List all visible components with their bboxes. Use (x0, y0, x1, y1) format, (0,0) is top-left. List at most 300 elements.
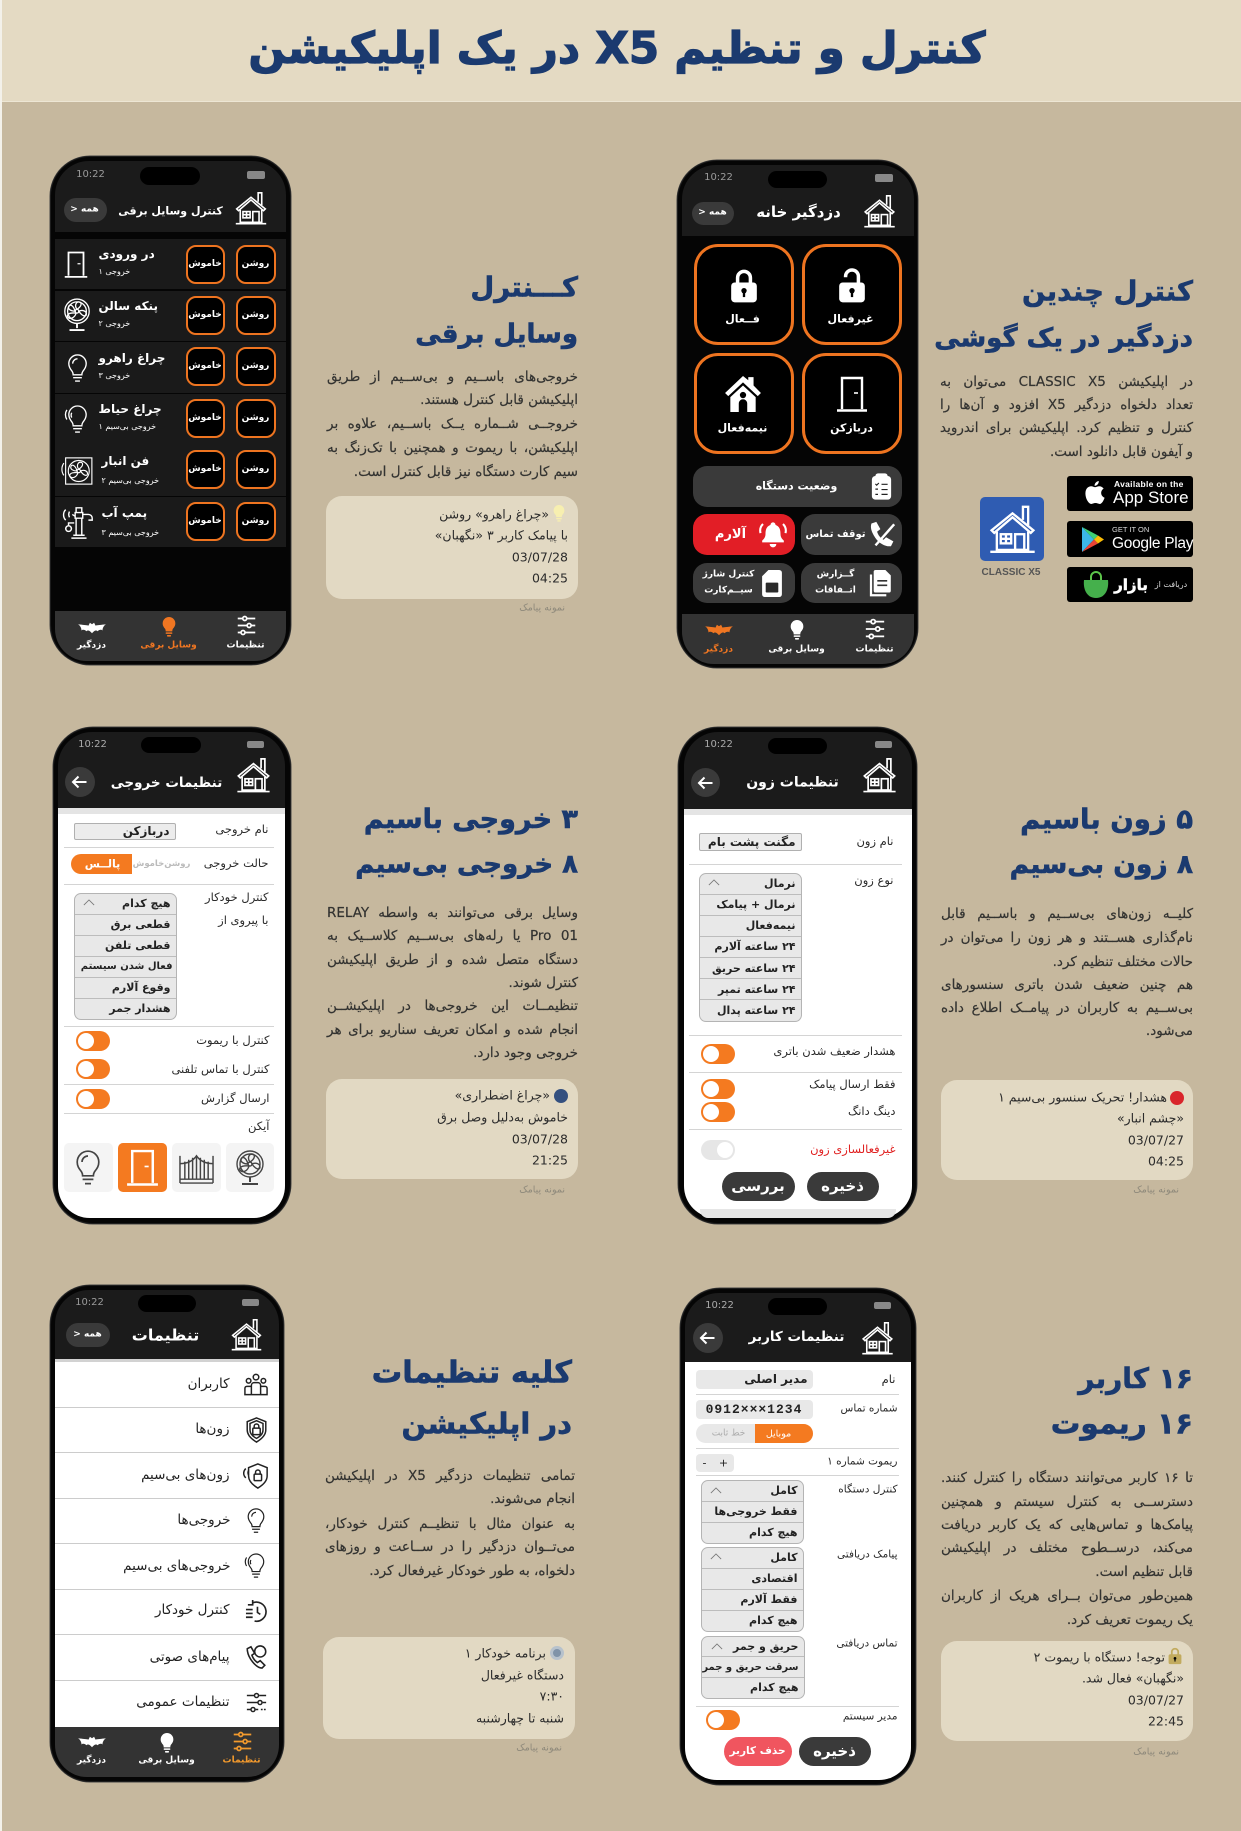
item: outputs: خروجی‌ها (177, 1511, 230, 1527)
sms bubble: 03/07/28 (512, 1132, 568, 1146)
field: auto control: کنترل خودکار (205, 890, 268, 904)
icon: locked (731, 270, 757, 302)
list: zone type (698, 872, 802, 1022)
back pill (64, 198, 106, 222)
nav: alarm (78, 1734, 106, 1748)
nav: settings (866, 618, 884, 640)
nav label: appliances: وسایل برقی (768, 644, 825, 654)
body text: به عنوان مثال با تنظیــم کنترل خودکار، (325, 1516, 575, 1532)
icon: house (230, 1318, 262, 1350)
item: wireless zones: زون‌های بی‌سیم (141, 1466, 230, 1482)
app header (58, 732, 284, 808)
badge: google play: Google Play (1112, 535, 1193, 552)
nav: appliances (160, 1732, 174, 1752)
nav: settings (232, 1730, 252, 1752)
chevron (710, 1554, 722, 1560)
sms bubble: شنبه تا چهارشنبه (476, 1710, 564, 1726)
list: zone type: ۲۴ ساعته تمپر (718, 983, 796, 996)
nav: settings (238, 616, 256, 636)
sms bubble: برنامه خودکار ۱ (465, 1646, 546, 1660)
field: output mode: حالت خروجی (204, 856, 268, 870)
input: output name: دربازکن (123, 824, 170, 838)
button: test: بررسی (731, 1177, 785, 1195)
badge: google play (1067, 521, 1193, 557)
heading: کـــنترل (470, 272, 578, 304)
app header (54, 160, 286, 232)
toggle: sms only (700, 1078, 734, 1098)
button: delete: حذف کاربر (729, 1745, 786, 1757)
notch (768, 738, 826, 754)
row: storage fan: روشن (242, 464, 269, 474)
stepper (696, 1454, 734, 1472)
row: storage fan (54, 444, 286, 496)
heading: ۸ زون بی‌سیم (1010, 849, 1193, 880)
screen title: تنظیمات (132, 1325, 199, 1344)
back pill (692, 202, 734, 224)
body text: وسایل برقی می‌توانند به واسطه RELAY (327, 905, 578, 921)
row: front door: خروجی ۱ (98, 267, 130, 276)
row: hall light: خروجی ۳ (98, 371, 130, 380)
row: yard light: چراغ حیاط (98, 401, 162, 415)
field: admin: مدیر سیستم (843, 1710, 898, 1722)
title: کنترل و تنظیم X5 در یک اپلیکیشن (248, 24, 986, 74)
battery (246, 740, 264, 748)
item: wireless outputs: خروجی‌های بی‌سیم (123, 1557, 230, 1573)
heading: کلیه تنظیمات (372, 1356, 572, 1391)
body text (325, 1464, 575, 1584)
nav: alarm (78, 622, 106, 634)
notch (140, 736, 200, 752)
heading: ۵ زون باسیم (1020, 804, 1193, 836)
status time: 10:22 (78, 738, 107, 750)
section: zones text (940, 804, 1194, 1195)
button: delete (724, 1736, 792, 1766)
item: users: کاربران (188, 1375, 230, 1391)
badge: app store (1067, 476, 1193, 511)
row: fan (54, 290, 286, 340)
input: zone name (698, 832, 802, 850)
body text: می‌تــوان دزدگیر را در ســاعت و روزهای (325, 1539, 575, 1555)
icon: house (862, 1322, 893, 1354)
app header (684, 732, 912, 808)
body text: تمامی تنظیمات دزدگیر X5 در اپلیکیشن (325, 1468, 575, 1484)
field: sms: پیامک دریافتی (837, 1548, 898, 1560)
button: sim (692, 562, 794, 602)
list: calls: حریق و جمر (733, 1640, 798, 1653)
item: wireless zones (54, 1452, 278, 1498)
screen title: تنظیمات خروجی (111, 774, 222, 790)
body text: قابل تنظیم است. (1095, 1564, 1193, 1580)
label: stop call: توقف تماس (806, 528, 865, 540)
sms bubble (326, 1079, 578, 1179)
toggle: report (76, 1088, 110, 1108)
input: output name (74, 822, 176, 840)
row: fan: خاموش (188, 310, 222, 320)
row: front door: روشن (242, 259, 269, 269)
label: disarm: غیرفعال (828, 312, 873, 325)
badge: bazaar: بازار (1114, 576, 1148, 594)
nav label: settings: تنظیمات (856, 644, 893, 654)
header band (2, 0, 1241, 102)
bottom nav (54, 1726, 278, 1776)
phone: output settings (53, 727, 291, 1224)
status time: 10:22 (76, 168, 105, 180)
list: zone type: نیمه‌فعال (746, 919, 796, 932)
input: phone: 0912×××1234 (706, 1402, 802, 1416)
screen title: تنظیمات زون (746, 774, 839, 790)
band (684, 808, 912, 814)
body text: دستگاه متصل شده و از طریق اپلیکیشن (327, 952, 578, 968)
caption: نمونه پیامک (516, 1742, 562, 1753)
app header (54, 1290, 278, 1358)
tile: gate (172, 1142, 220, 1192)
icon: house (864, 195, 895, 228)
button: report (800, 562, 902, 602)
screen title: دزدگیر خانه (756, 202, 841, 220)
back pill (66, 1322, 110, 1346)
row: storage fan: خاموش (188, 464, 222, 474)
field: calls: تماس دریافتی (836, 1637, 898, 1649)
button: save (806, 1172, 878, 1200)
label: report: گــزارش (817, 569, 854, 579)
nav label: appliances: وسایل برقی (140, 640, 197, 650)
field: output name: نام خروجی (215, 822, 268, 836)
heading: ۱۶ ریموت (1051, 1406, 1193, 1440)
phone: user settings (680, 1288, 916, 1785)
button: disarm (802, 244, 902, 344)
toggle: disable zone (700, 1140, 734, 1160)
heading (323, 1352, 575, 1444)
list: device control: فقط خروجی‌ها (714, 1505, 798, 1518)
icon: sim (762, 570, 782, 597)
nav: alarm (705, 624, 733, 636)
item: voice messages (54, 1634, 278, 1680)
row: hall light: خاموش (188, 361, 222, 371)
icon: house (237, 758, 270, 792)
section: settings text (323, 1352, 575, 1754)
field: follow: با پیروی از (218, 913, 268, 927)
row: fan: خروجی ۲ (98, 319, 130, 328)
body text: می‌شود. (1146, 1023, 1193, 1039)
toggle: low battery (700, 1044, 734, 1064)
tile: fan (226, 1142, 274, 1192)
body text: همین‌طور می‌توان بــرای هریک از کاربران (941, 1588, 1193, 1604)
back pill: همه < (698, 207, 727, 217)
body text: دسترســی به کنترل سیستم و همچنین (941, 1494, 1193, 1510)
app header (682, 164, 914, 236)
battery (246, 170, 264, 178)
badge: app store: Available on the (1114, 479, 1184, 489)
bottom nav (54, 610, 286, 660)
icon: unlocked (839, 268, 865, 302)
sms bubble: 03/07/27 (1128, 1132, 1184, 1148)
button: save: ذخیره (821, 1177, 864, 1195)
sms bubble: هشدار! تحریک سنسور بی‌سیم ۱ (998, 1090, 1167, 1104)
list: device control: کامل (770, 1484, 798, 1497)
sms bubble: دستگاه غیرفعال (481, 1668, 564, 1682)
badge: app store: App Store (1113, 488, 1189, 507)
row: yard light (54, 394, 286, 444)
chevron (710, 1642, 722, 1650)
bottom band (700, 1208, 896, 1218)
sms bubble: 21:25 (532, 1152, 568, 1168)
heading (355, 804, 578, 880)
item: general: تنظیمات عمومی (136, 1693, 230, 1709)
body text: دلخواه، به طور خودکار غیرفعال کرد. (369, 1563, 575, 1579)
chevron (708, 880, 720, 886)
phone: settings list (50, 1285, 284, 1782)
sms bubble: «چشم انبار» (1117, 1110, 1184, 1126)
segmented control: روشن‌خاموش (133, 858, 190, 868)
button: alarm (692, 514, 794, 554)
row: yard light: خروجی بی‌سیم ۱ (98, 422, 156, 431)
toggle: phone call (76, 1058, 110, 1078)
row: storage fan: فن انبار (102, 453, 149, 467)
item: auto control (54, 1590, 278, 1634)
list: sms: اقتصادی (751, 1572, 798, 1585)
body text (326, 369, 578, 480)
field: zone type: نوع زون (854, 873, 894, 887)
label: arm: فــعال (725, 312, 760, 325)
list: zone type: ۲۴ ساعته آلارم (714, 940, 796, 953)
heading: دزدگیر در یک گوشی (934, 323, 1193, 353)
bottom nav (682, 614, 914, 664)
list: auto control: فعال شدن سیستم (81, 961, 172, 972)
button: device status (692, 466, 902, 506)
list: device control: هیچ کدام (749, 1526, 798, 1539)
label: disable zone: غیرفعالسازی زون (810, 1142, 896, 1156)
back button (64, 766, 94, 796)
status time: 10:22 (75, 1296, 104, 1308)
label: remote: کنترل با ریموت (196, 1033, 270, 1047)
label: phone call: کنترل با تماس تلفنی (171, 1062, 270, 1076)
nav label: appliances: وسایل برقی (138, 1755, 195, 1765)
segmented control: پالــس (85, 857, 120, 870)
body text: تنظیمــات این خروجی‌ها در اپلیکیشــن (327, 998, 578, 1014)
nav label: settings: تنظیمات (227, 640, 264, 650)
sms bubble: توجه! دستگاه با ریموت ۲ (1034, 1650, 1165, 1664)
row: water pump (54, 496, 286, 546)
list: calls (700, 1636, 804, 1698)
sms bubble (941, 1641, 1193, 1741)
label: alarm: آلارم (715, 527, 746, 542)
body text: نام‌گذاری هســتند و هر زون را می‌توان در (941, 930, 1193, 946)
chevron (84, 900, 94, 906)
icon: door (837, 376, 867, 412)
button: arm (694, 244, 794, 344)
screen (54, 1358, 278, 1726)
icon: house (863, 758, 896, 792)
nav: appliances (790, 620, 804, 640)
notch (768, 1298, 826, 1314)
sms bubble: با پیامک کاربر ۳ «نگهبان» (435, 528, 568, 542)
phone: zone settings (678, 727, 917, 1224)
band (58, 808, 284, 814)
back pill: همه < (70, 204, 99, 214)
screen title: کنترل وسایل برقی (118, 204, 223, 217)
button: test (722, 1172, 794, 1200)
field: name: نام (882, 1372, 896, 1386)
body text: اپلیکیشن، با ریموت و همچنین با تک‌زنگ به (327, 440, 578, 456)
list: zone type: ۲۴ ساعته پدال (717, 1004, 796, 1017)
body text (940, 906, 1194, 1039)
list: device control (700, 1480, 804, 1544)
row: front door: خاموش (188, 259, 222, 269)
item: users (54, 1362, 278, 1406)
field: zone name: نام زون (856, 834, 894, 848)
heading: کنترل چندین (1022, 276, 1193, 308)
back button (692, 1322, 722, 1352)
row: water pump: روشن (242, 516, 269, 526)
icon: bell (759, 522, 787, 548)
battery (874, 1302, 890, 1308)
body text: تا ۱۶ کاربر می‌توانند دستگاه را کنترل کنند. (941, 1470, 1193, 1486)
label: report: ارسال گزارش (201, 1091, 270, 1105)
app icon (980, 497, 1044, 578)
list: zone type: ۲۴ ساعته حریق (712, 962, 796, 975)
section: users text (941, 1362, 1193, 1757)
screen (684, 1362, 910, 1780)
body text: تعداد دلخواه دزدگیر X5 افزود و آن‌ها را (940, 397, 1193, 413)
heading: وسایل برقی (415, 319, 578, 349)
label: sms only: فقط ارسال پیامک (809, 1077, 896, 1091)
label: half arm: نیمه‌فعال (718, 421, 767, 434)
nav label: alarm: دزدگیر (77, 1755, 106, 1765)
list: auto control: هشدار جمر (109, 1002, 170, 1015)
sms bubble: «نگهبان» فعال شد. (1082, 1670, 1184, 1686)
sms bubble (323, 1637, 575, 1739)
body text: خروجــی شــماره یــک باســیم، علاوه بر (327, 416, 578, 432)
body text: می‌کند، درســطوح مختلف در اپلیکیشن (941, 1540, 1193, 1556)
body text: کلیــه زون‌های بی‌ســیم و باســیم قابل (941, 906, 1193, 922)
row: front door: در ورودی (98, 246, 155, 260)
button: save: ذخیره (813, 1742, 856, 1760)
icon: clipboard (872, 473, 892, 500)
caption: نمونه پیامک (519, 1184, 565, 1195)
phone: alarm home (677, 160, 918, 668)
item: wireless outputs (54, 1544, 278, 1588)
label: report second line: اتــفاقات (815, 585, 856, 595)
tile: bulb (64, 1142, 112, 1192)
section: multi alarm text (934, 276, 1194, 460)
body text: انجام می‌شوند. (490, 1491, 575, 1507)
item: outputs (54, 1498, 278, 1542)
body text: سیم کارت دستگاه نیز قابل کنترل است. (354, 464, 578, 480)
stepper: - (703, 1456, 706, 1469)
sms bubble: 03/07/27 (1128, 1692, 1184, 1708)
back button (690, 768, 720, 796)
chevron (710, 1488, 722, 1494)
label: icon: آیکن (248, 1119, 270, 1133)
toggle: admin (706, 1710, 740, 1730)
row: hall light: روشن (242, 361, 269, 371)
label: device status: وضعیت دستگاه (756, 479, 837, 492)
input: name (696, 1370, 812, 1388)
stepper: + (719, 1456, 728, 1469)
list: auto control: هیچ کدام (122, 897, 170, 910)
battery (874, 740, 892, 748)
list: sms: هیچ کدام (749, 1614, 798, 1627)
status time: 10:22 (705, 1300, 734, 1310)
status time: 10:22 (704, 738, 733, 750)
caption: نمونه پیامک (519, 602, 565, 613)
back pill: همه < (73, 1329, 102, 1339)
nav: appliances (162, 617, 176, 637)
notch (768, 170, 826, 188)
body text: انجام شده و امکان تعریف سناریو برای هر (327, 1022, 578, 1038)
sms bubble: 22:45 (1148, 1714, 1184, 1728)
list: zone type: نرمال (764, 877, 796, 890)
body text: 01 Pro یا رله‌های بی‌ســیم کلاســیک به (327, 928, 578, 944)
field: remote: ریموت شماره ۱ (827, 1455, 898, 1467)
screen (58, 808, 284, 1218)
caption: نمونه پیامک (1133, 1184, 1179, 1195)
heading: ۱۶ کاربر (1078, 1362, 1193, 1395)
left edge strip (0, 0, 2, 1831)
segmented control (696, 1424, 812, 1442)
phone: appliances (50, 156, 291, 665)
input: zone name: مگنت پشت بام (708, 834, 796, 848)
badge: google play: GET IT ON (1112, 525, 1149, 534)
list: sms: فقط آلارم (740, 1593, 798, 1606)
body text: خروجی وجود دارد. (473, 1045, 578, 1061)
sms bubble: خاموش به‌دلیل وصل برق (437, 1110, 568, 1124)
list: auto control: قطعی تلفن (105, 939, 170, 952)
body text: کنترل و تنظیم کرد. اپلیکیشن برای اندروید (940, 420, 1193, 436)
input: name: مدیر اصلی (744, 1372, 808, 1386)
battery (874, 174, 892, 182)
row: yard light: روشن (242, 413, 269, 423)
sms bubble (326, 496, 578, 599)
body text (326, 905, 578, 1061)
tile: door (118, 1142, 166, 1192)
button: save (798, 1736, 870, 1766)
field: device control: کنترل دستگاه (838, 1483, 898, 1495)
toggle: ding dong (700, 1102, 734, 1122)
list: calls: هیچ کدام (750, 1681, 798, 1694)
button: latch (802, 352, 902, 454)
body text: حالات مختلف تنظیم کرد. (1053, 954, 1193, 970)
nav label: settings: تنظیمات (223, 1755, 260, 1765)
list: auto control (74, 892, 176, 1020)
section: outputs text (326, 804, 578, 1195)
body text: یک ریموت تعریف کرد. (1067, 1612, 1193, 1628)
list: auto control: وقوع آلارم (112, 981, 170, 994)
label: sim: کنترل شارژ (703, 569, 754, 579)
caption: نمونه پیامک (1133, 1746, 1179, 1757)
segmented control: خط ثابت (712, 1428, 745, 1438)
icon: document (870, 570, 891, 596)
list: calls: سرقت حریق و جمر (702, 1662, 798, 1672)
list: zone type: نرمال + پیامک (716, 898, 796, 911)
body text (940, 374, 1194, 460)
app header (684, 1292, 910, 1362)
field: phone: شماره تماس (840, 1402, 898, 1414)
battery (242, 1298, 258, 1306)
heading (934, 276, 1194, 354)
body text: اپلیکیشن قابل کنترل هستند. (420, 392, 578, 408)
icon: house (236, 192, 266, 224)
row: water pump: خاموش (188, 516, 222, 526)
body text: و آیفون قابل دانلود است. (1050, 444, 1193, 460)
row: fan: پنکه سالن (98, 298, 158, 312)
row: front door (54, 238, 286, 288)
item: general (54, 1680, 278, 1726)
label: low battery: هشدار ضعیف شدن باتری (773, 1044, 896, 1058)
heading (1010, 804, 1194, 880)
label: latch: دربازکن (830, 421, 873, 434)
button: stop call (800, 514, 902, 554)
